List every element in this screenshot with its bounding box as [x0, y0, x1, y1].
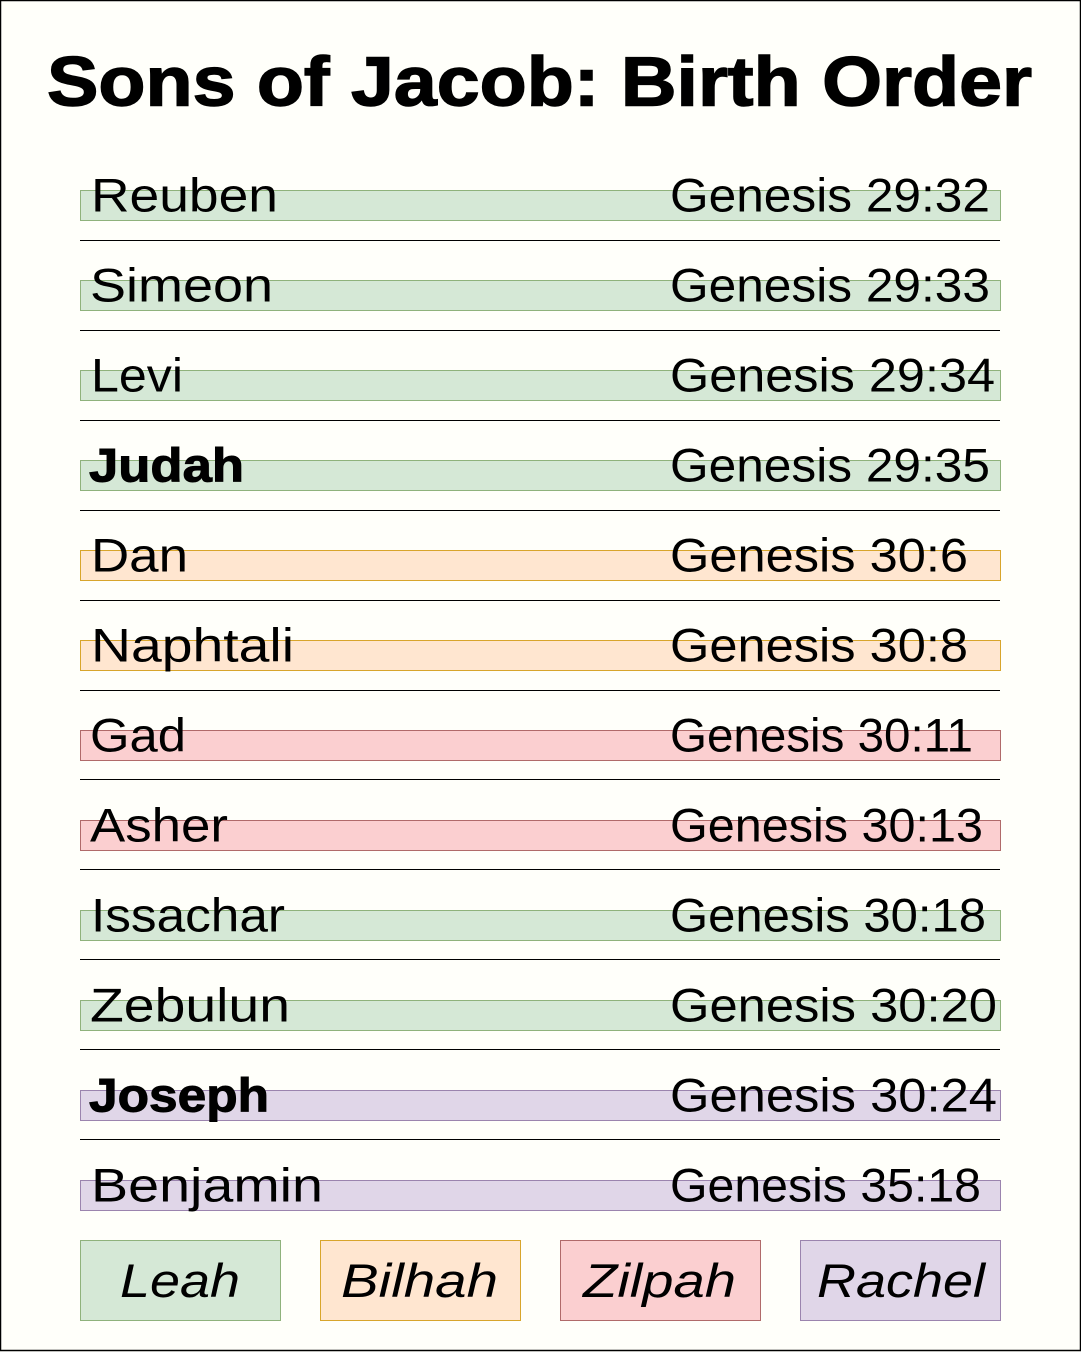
- row: Naphtali: Genesis 30:8: [670, 618, 968, 672]
- row: Dan: Dan: [91, 528, 188, 582]
- row: Reuben: Genesis 29:32: [670, 168, 990, 222]
- row: Zebulun: Genesis 30:20: [670, 978, 997, 1032]
- row: Gad: Gad: [90, 708, 186, 762]
- row: Joseph: Genesis 30:24: [670, 1068, 997, 1122]
- row: Levi: Genesis 29:34: [670, 348, 995, 402]
- row: Levi: [80, 348, 1000, 402]
- legend: Rachel: [800, 1240, 1000, 1320]
- row: Joseph: [80, 1068, 1000, 1122]
- legend: Bilhah: Bilhah: [341, 1254, 498, 1307]
- row: Issachar: [80, 888, 1000, 942]
- title: Sons of Jacob: Birth Order: [47, 42, 1032, 120]
- row: Benjamin: Genesis 35:18: [670, 1158, 981, 1212]
- row: Benjamin: Benjamin: [91, 1158, 323, 1212]
- legend: Zilpah: Zilpah: [582, 1254, 736, 1307]
- row: Asher: [80, 798, 1000, 852]
- row: Joseph: Joseph: [89, 1068, 269, 1122]
- row: Gad: Genesis 30:11: [670, 708, 973, 762]
- row: Naphtali: [80, 618, 1000, 672]
- row: Simeon: Genesis 29:33: [670, 258, 990, 312]
- row: Reuben: Reuben: [91, 168, 278, 222]
- row: Issachar: Issachar: [91, 888, 285, 942]
- legend: [80, 1240, 1000, 1320]
- legend: Zilpah: [560, 1240, 760, 1320]
- row: Benjamin: [80, 1158, 1000, 1212]
- row: Judah: Judah: [89, 438, 244, 492]
- legend: Leah: [80, 1240, 280, 1320]
- row: Judah: [80, 438, 1000, 492]
- legend: Rachel: Rachel: [817, 1254, 987, 1307]
- legend: Leah: Leah: [120, 1254, 240, 1307]
- row: Naphtali: Naphtali: [91, 618, 294, 672]
- row: Issachar: Genesis 30:18: [670, 888, 986, 942]
- row: Simeon: Simeon: [90, 258, 273, 312]
- row: Zebulun: [80, 978, 1000, 1032]
- row: Levi: Levi: [91, 348, 183, 402]
- row: Zebulun: Zebulun: [90, 978, 290, 1032]
- legend: Bilhah: [320, 1240, 520, 1320]
- row: Dan: Genesis 30:6: [670, 528, 968, 582]
- row: Asher: Asher: [90, 798, 228, 852]
- row: Gad: [80, 708, 1000, 762]
- row: Judah: Genesis 29:35: [670, 438, 990, 492]
- row: Asher: Genesis 30:13: [670, 798, 983, 852]
- row: Simeon: [80, 258, 1000, 312]
- row: Dan: [80, 528, 1000, 582]
- row: Reuben: [80, 168, 1000, 222]
